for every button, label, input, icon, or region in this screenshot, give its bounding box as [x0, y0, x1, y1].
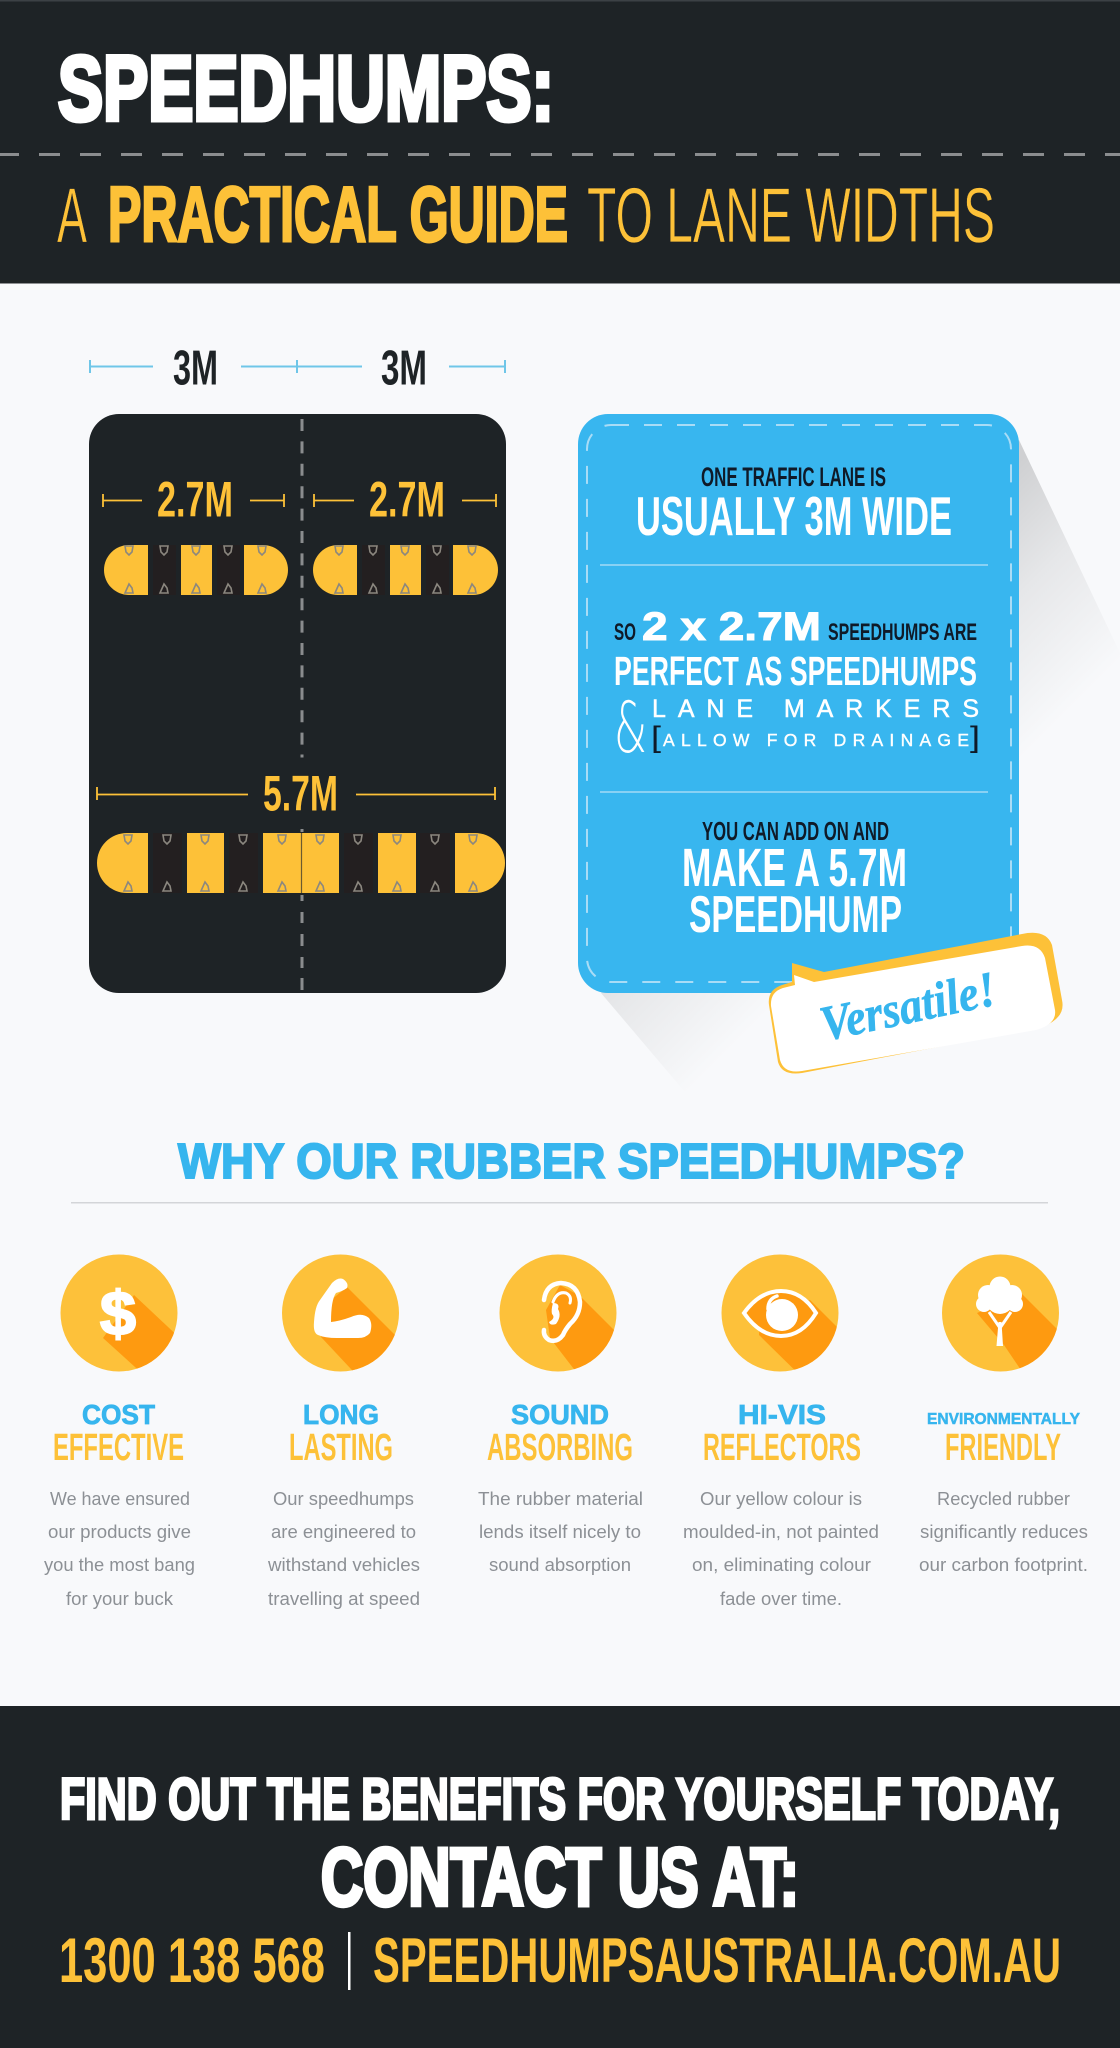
text: long lasting description: travelling at speed [268, 1589, 420, 1609]
call to action: CONTACT US AT: [321, 1832, 799, 1923]
text block: make a 5.7m speedhump: SPEEDHUMP [689, 886, 902, 944]
2.7M label right: 2.7M [369, 472, 445, 528]
text block: make a 5.7m speedhump [682, 816, 907, 944]
label: environmentally friendly: ENVIRONMENTALLY [927, 1411, 1080, 1428]
text: sound absorbing description: sound absorption [489, 1555, 631, 1575]
2.7M label right [314, 472, 496, 528]
benefit: hi-vis reflectors [683, 1254, 879, 1609]
text: environmentally friendly description: our carbon footprint. [919, 1555, 1088, 1575]
speedhump 2.7M left [104, 545, 288, 595]
text block: 2 x 2.7m speedhumps [614, 605, 980, 769]
text: long lasting description [267, 1489, 420, 1609]
subtitle: PRACTICAL GUIDE [108, 170, 568, 258]
callout: versatile [769, 933, 1063, 1074]
speedhump 5.7M [97, 833, 505, 893]
label: hi-vis reflectors: HI-VIS [738, 1399, 826, 1430]
header band [0, 0, 1120, 284]
label: environmentally friendly [927, 1411, 1080, 1469]
2.7M label left [103, 472, 284, 528]
icon: muscle [282, 1254, 399, 1372]
speedhump 2.7M right [313, 545, 498, 595]
text: long lasting description: are engineered to [271, 1522, 416, 1542]
callout: versatile: Versatile! [815, 960, 1001, 1052]
text: cost effective description: for your buck [66, 1589, 174, 1609]
call to action [60, 1767, 1060, 1923]
3M lane width markers: 3M [173, 342, 218, 396]
5.7M label [97, 766, 495, 822]
text block: 2 x 2.7m speedhumps: SPEEDHUMPS ARE [828, 619, 977, 646]
text: cost effective description: you the most bang [44, 1555, 195, 1575]
text: hi-vis description: fade over time. [720, 1589, 842, 1609]
label: hi-vis reflectors: REFLECTORS [703, 1427, 861, 1469]
text block: 2 x 2.7m speedhumps: [ [651, 721, 662, 754]
text: hi-vis description [683, 1489, 879, 1609]
text block: 2 x 2.7m speedhumps: LANE MARKERS [652, 695, 979, 723]
panel: road diagram [89, 414, 506, 993]
text: cost effective description: We have ensured [50, 1489, 190, 1509]
text: hi-vis description: on, eliminating colour [692, 1555, 871, 1575]
text block: 2 x 2.7m speedhumps: & [614, 687, 647, 769]
text block: usually 3m wide [636, 462, 952, 547]
icon: ear [500, 1254, 616, 1372]
icon: eye [722, 1254, 838, 1372]
footer band [0, 1706, 1120, 2048]
text block: 2 x 2.7m speedhumps: 2 x 2.7M [642, 605, 821, 649]
text block: 2 x 2.7m speedhumps: ALLOW FOR DRAINAGE [663, 730, 969, 750]
long shadow of blue card [601, 440, 1120, 1300]
label: sound absorbing: ABSORBING [487, 1427, 633, 1469]
text: sound absorbing description: The rubber material [478, 1489, 643, 1509]
text: environmentally friendly description [919, 1489, 1088, 1575]
panel: blue info card [578, 414, 1019, 993]
benefit: cost effective [44, 1254, 200, 1609]
label: cost effective: COST [82, 1399, 155, 1430]
text: cost effective description: our products give [48, 1522, 191, 1542]
label: long lasting: LONG [303, 1399, 379, 1430]
title: SPEEDHUMPS: [58, 38, 554, 140]
text: cost effective description [44, 1489, 195, 1609]
label: cost effective: EFFECTIVE [53, 1427, 184, 1469]
text: sound absorbing description [478, 1489, 643, 1575]
subtitle: A [57, 171, 87, 259]
text block: make a 5.7m speedhump: YOU CAN ADD ON AND [702, 816, 889, 846]
2.7M label left: 2.7M [157, 472, 233, 528]
text: long lasting description: withstand vehicles [267, 1555, 420, 1575]
text: hi-vis description: moulded-in, not painted [683, 1522, 879, 1542]
3M lane width markers [90, 342, 505, 396]
contact details [59, 1926, 1061, 1996]
heading: why our rubber speedhumps: WHY OUR RUBBER SPEEDHUMPS? [178, 1135, 965, 1189]
3M lane width markers: 3M [381, 342, 427, 396]
text: hi-vis description: Our yellow colour is [700, 1489, 862, 1509]
benefit: long lasting [267, 1254, 420, 1609]
text: sound absorbing description: lends itself nicely to [479, 1522, 641, 1542]
text block: usually 3m wide: ONE TRAFFIC LANE IS [701, 462, 886, 492]
label: hi-vis reflectors [703, 1399, 861, 1469]
text block: 2 x 2.7m speedhumps: ] [970, 721, 980, 754]
benefit: sound absorbing [478, 1254, 643, 1575]
text block: make a 5.7m speedhump: MAKE A 5.7M [682, 838, 907, 898]
icon: dollar [60, 1254, 178, 1372]
text block: 2 x 2.7m speedhumps: SO [614, 619, 636, 646]
label: sound absorbing [487, 1399, 633, 1469]
label: sound absorbing: SOUND [511, 1399, 609, 1430]
text: long lasting description: Our speedhumps [273, 1489, 414, 1509]
label: cost effective [53, 1399, 184, 1469]
label: long lasting [289, 1399, 393, 1469]
text: environmentally friendly description: Recycled rubber [937, 1489, 1070, 1509]
contact details: 1300 138 568 [59, 1926, 325, 1996]
benefit: environmentally friendly [919, 1254, 1088, 1575]
label: long lasting: LASTING [289, 1427, 393, 1469]
icon: tree [942, 1254, 1059, 1372]
icon: dollar: $ [100, 1280, 136, 1349]
5.7M label: 5.7M [263, 766, 338, 822]
text: environmentally friendly description: significantly reduces [920, 1522, 1088, 1542]
